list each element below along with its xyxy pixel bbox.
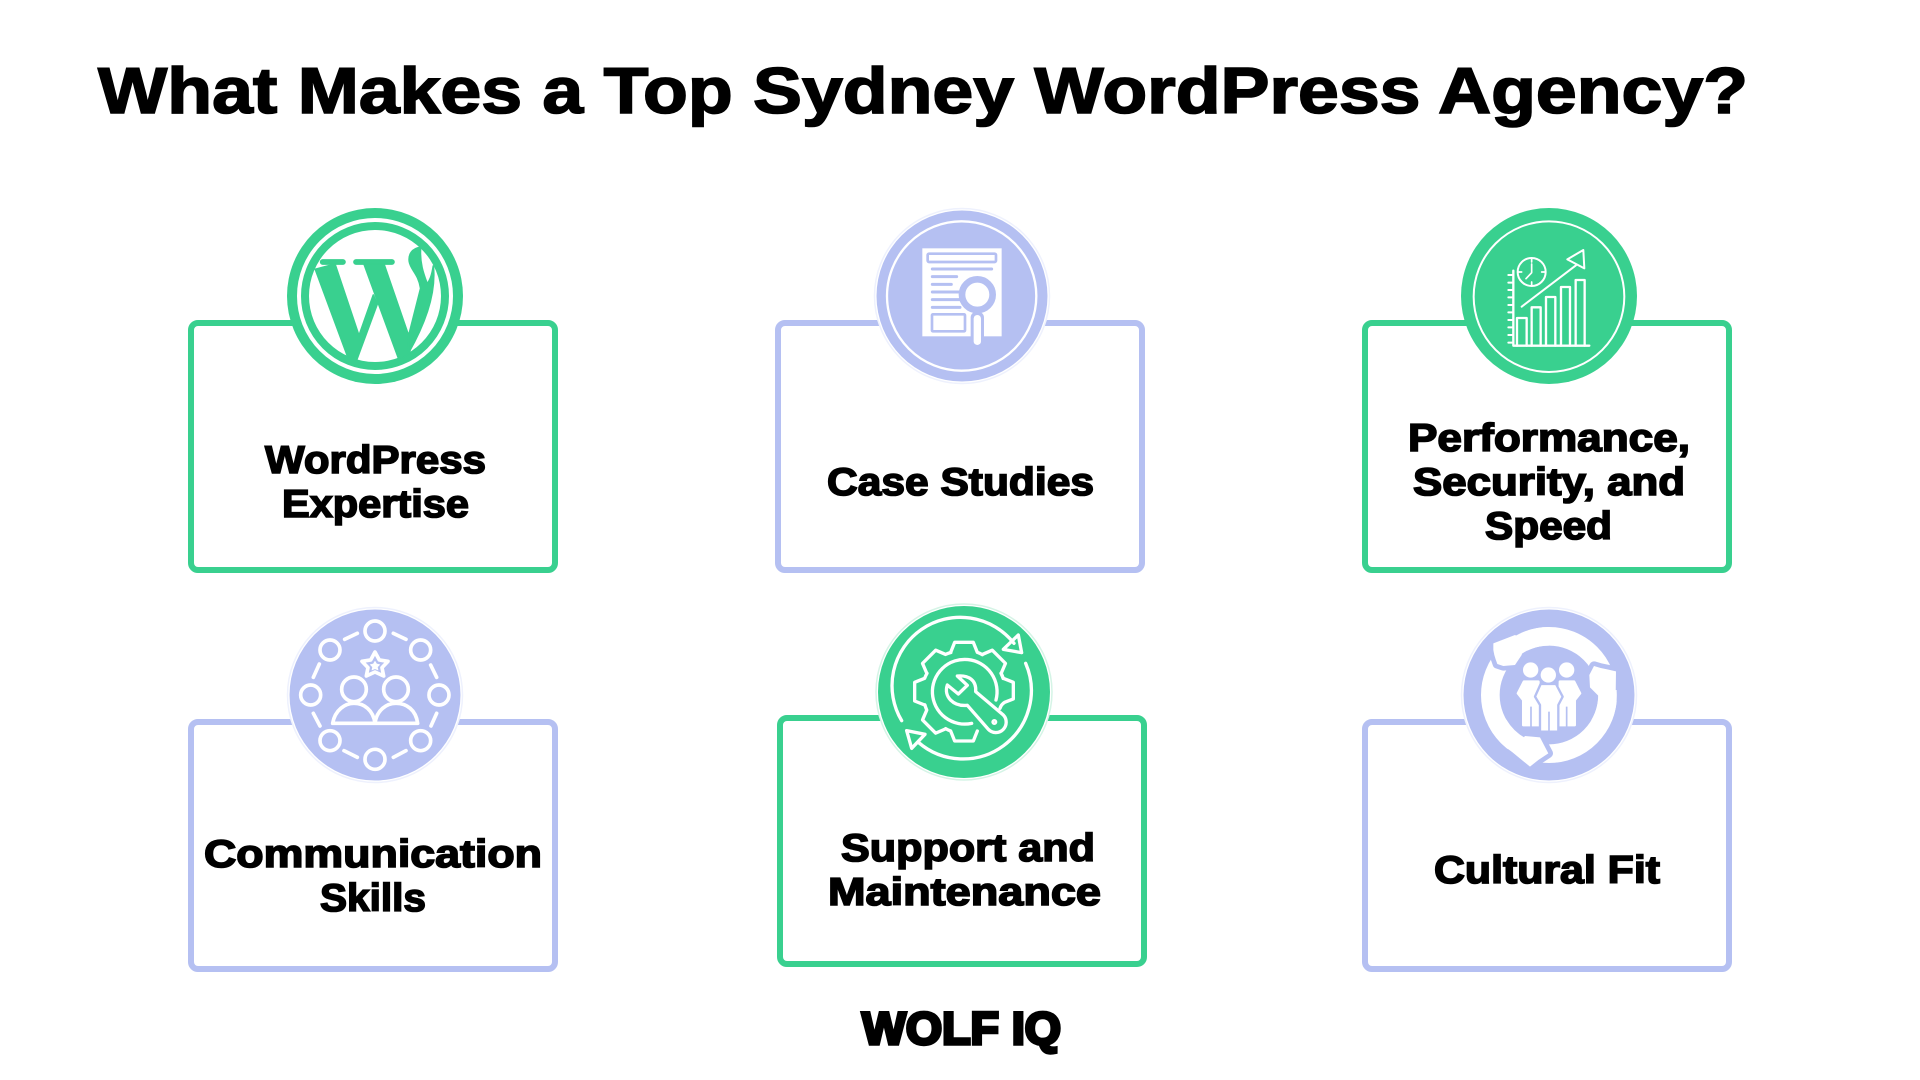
panel frame: Support and Maintenance: [780, 718, 1144, 964]
panel frame: Cultural Fit: [1365, 722, 1729, 969]
panel: Support and Maintenance: [780, 604, 1144, 964]
label: Skills: Skills: [320, 877, 426, 920]
panel: WordPress Expertise: [191, 208, 555, 570]
panel: Case Studies: [778, 208, 1142, 570]
icon: WordPress logo: [287, 208, 463, 384]
icon: rising bar chart and clock: [1461, 208, 1637, 384]
icon: team circle with star: [288, 608, 462, 782]
title: What Makes a Top Sydney WordPress Agency?: [98, 54, 1748, 127]
panel: Communication Skills: [191, 608, 555, 969]
panel frame: Performance: [1365, 323, 1729, 570]
label: Expertise: Expertise: [282, 483, 469, 526]
label: Cultural Fit: Cultural Fit: [1434, 849, 1660, 892]
icon: gear with wrench: [876, 604, 1052, 780]
label: Maintenance: Maintenance: [828, 871, 1101, 914]
panel frame: WordPress Expertise: [191, 323, 555, 570]
panel: Performance, Security, and Speed: [1365, 208, 1729, 570]
icon: document with magnifier: [874, 208, 1050, 384]
label: Speed: Speed: [1485, 505, 1612, 548]
label: Case Studies: Case Studies: [827, 461, 1094, 504]
panel: Cultural Fit: [1365, 608, 1729, 969]
label: Security, and: Security, and: [1413, 461, 1685, 504]
label: Support and: Support and: [841, 827, 1095, 870]
panel frame: Case Studies: [778, 323, 1142, 570]
logo: WOLF IQ: WOLF IQ: [862, 1003, 1061, 1054]
label: Performance,: Performance,: [1408, 417, 1690, 460]
icon: team inside fists ring: [1462, 608, 1636, 782]
label: Communication: Communication: [204, 833, 542, 876]
panel frame: Communication Skills: [191, 722, 555, 969]
label: WordPress: WordPress: [265, 439, 486, 482]
